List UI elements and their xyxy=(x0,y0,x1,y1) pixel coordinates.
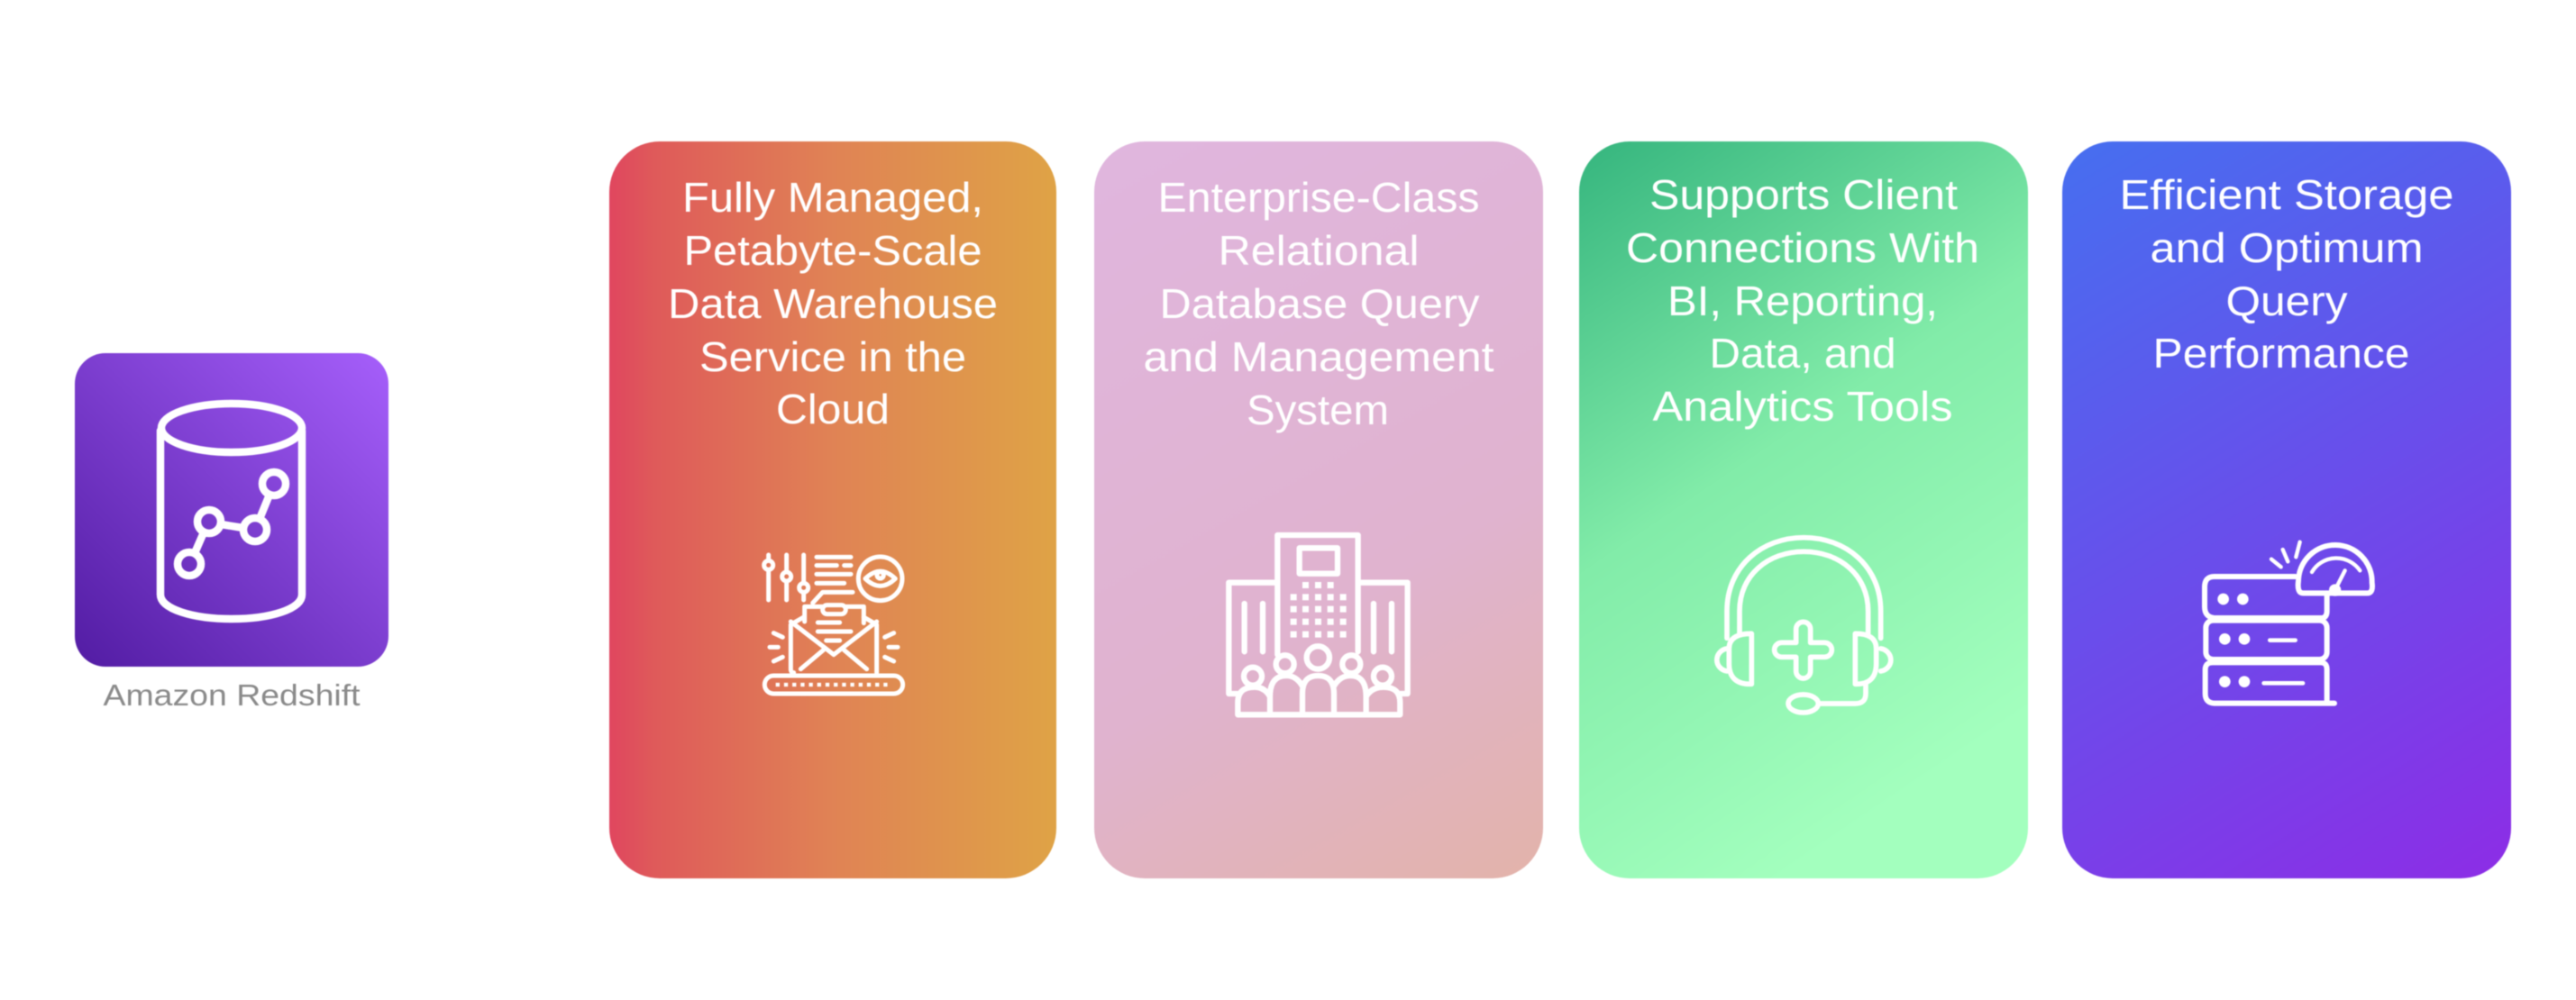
card heading: Service in the xyxy=(699,333,966,380)
icon: envelope with controls and eye xyxy=(764,555,903,694)
card heading xyxy=(668,174,998,432)
card heading xyxy=(2120,171,2453,377)
card heading: Efficient Storage xyxy=(2120,171,2453,218)
card heading xyxy=(1626,171,1979,430)
icon: office buildings with people xyxy=(1229,535,1408,714)
card background xyxy=(2062,141,2511,878)
card heading: Fully Managed, xyxy=(682,174,983,221)
logo tile xyxy=(75,353,388,667)
card background xyxy=(1094,141,1543,878)
card heading: Petabyte-Scale xyxy=(683,227,982,274)
card heading: Cloud xyxy=(776,386,890,432)
card heading: and Management xyxy=(1143,333,1494,380)
card heading: Enterprise-Class xyxy=(1157,174,1480,221)
panel: efficient storage xyxy=(2062,141,2511,878)
card heading xyxy=(1143,174,1494,433)
card heading: BI, Reporting, xyxy=(1667,277,1938,324)
card heading: Data, and xyxy=(1709,330,1896,377)
icon: headset with plus xyxy=(1717,538,1891,713)
panel: enterprise class xyxy=(1094,141,1543,878)
logo label: Amazon Redshift xyxy=(103,678,361,712)
panel: fully managed xyxy=(609,141,1056,878)
icon: database cylinder with line chart xyxy=(160,404,302,619)
panel: Amazon Redshift logo xyxy=(75,353,388,712)
icon: server stack with speed gauge xyxy=(2205,542,2372,704)
card heading: Performance xyxy=(2152,330,2410,377)
card heading: Analytics Tools xyxy=(1653,383,1952,430)
card heading: Connections With xyxy=(1626,224,1979,271)
card heading: Relational xyxy=(1219,227,1419,274)
card background xyxy=(609,141,1056,878)
card heading: Database Query xyxy=(1159,280,1480,327)
card heading: and Optimum xyxy=(2151,224,2423,271)
card background xyxy=(1579,141,2028,878)
card heading: System xyxy=(1247,386,1389,433)
card heading: Query xyxy=(2226,277,2347,324)
card heading: Supports Client xyxy=(1649,171,1958,218)
card heading: Data Warehouse xyxy=(668,280,998,327)
panel: client connections xyxy=(1579,141,2028,878)
